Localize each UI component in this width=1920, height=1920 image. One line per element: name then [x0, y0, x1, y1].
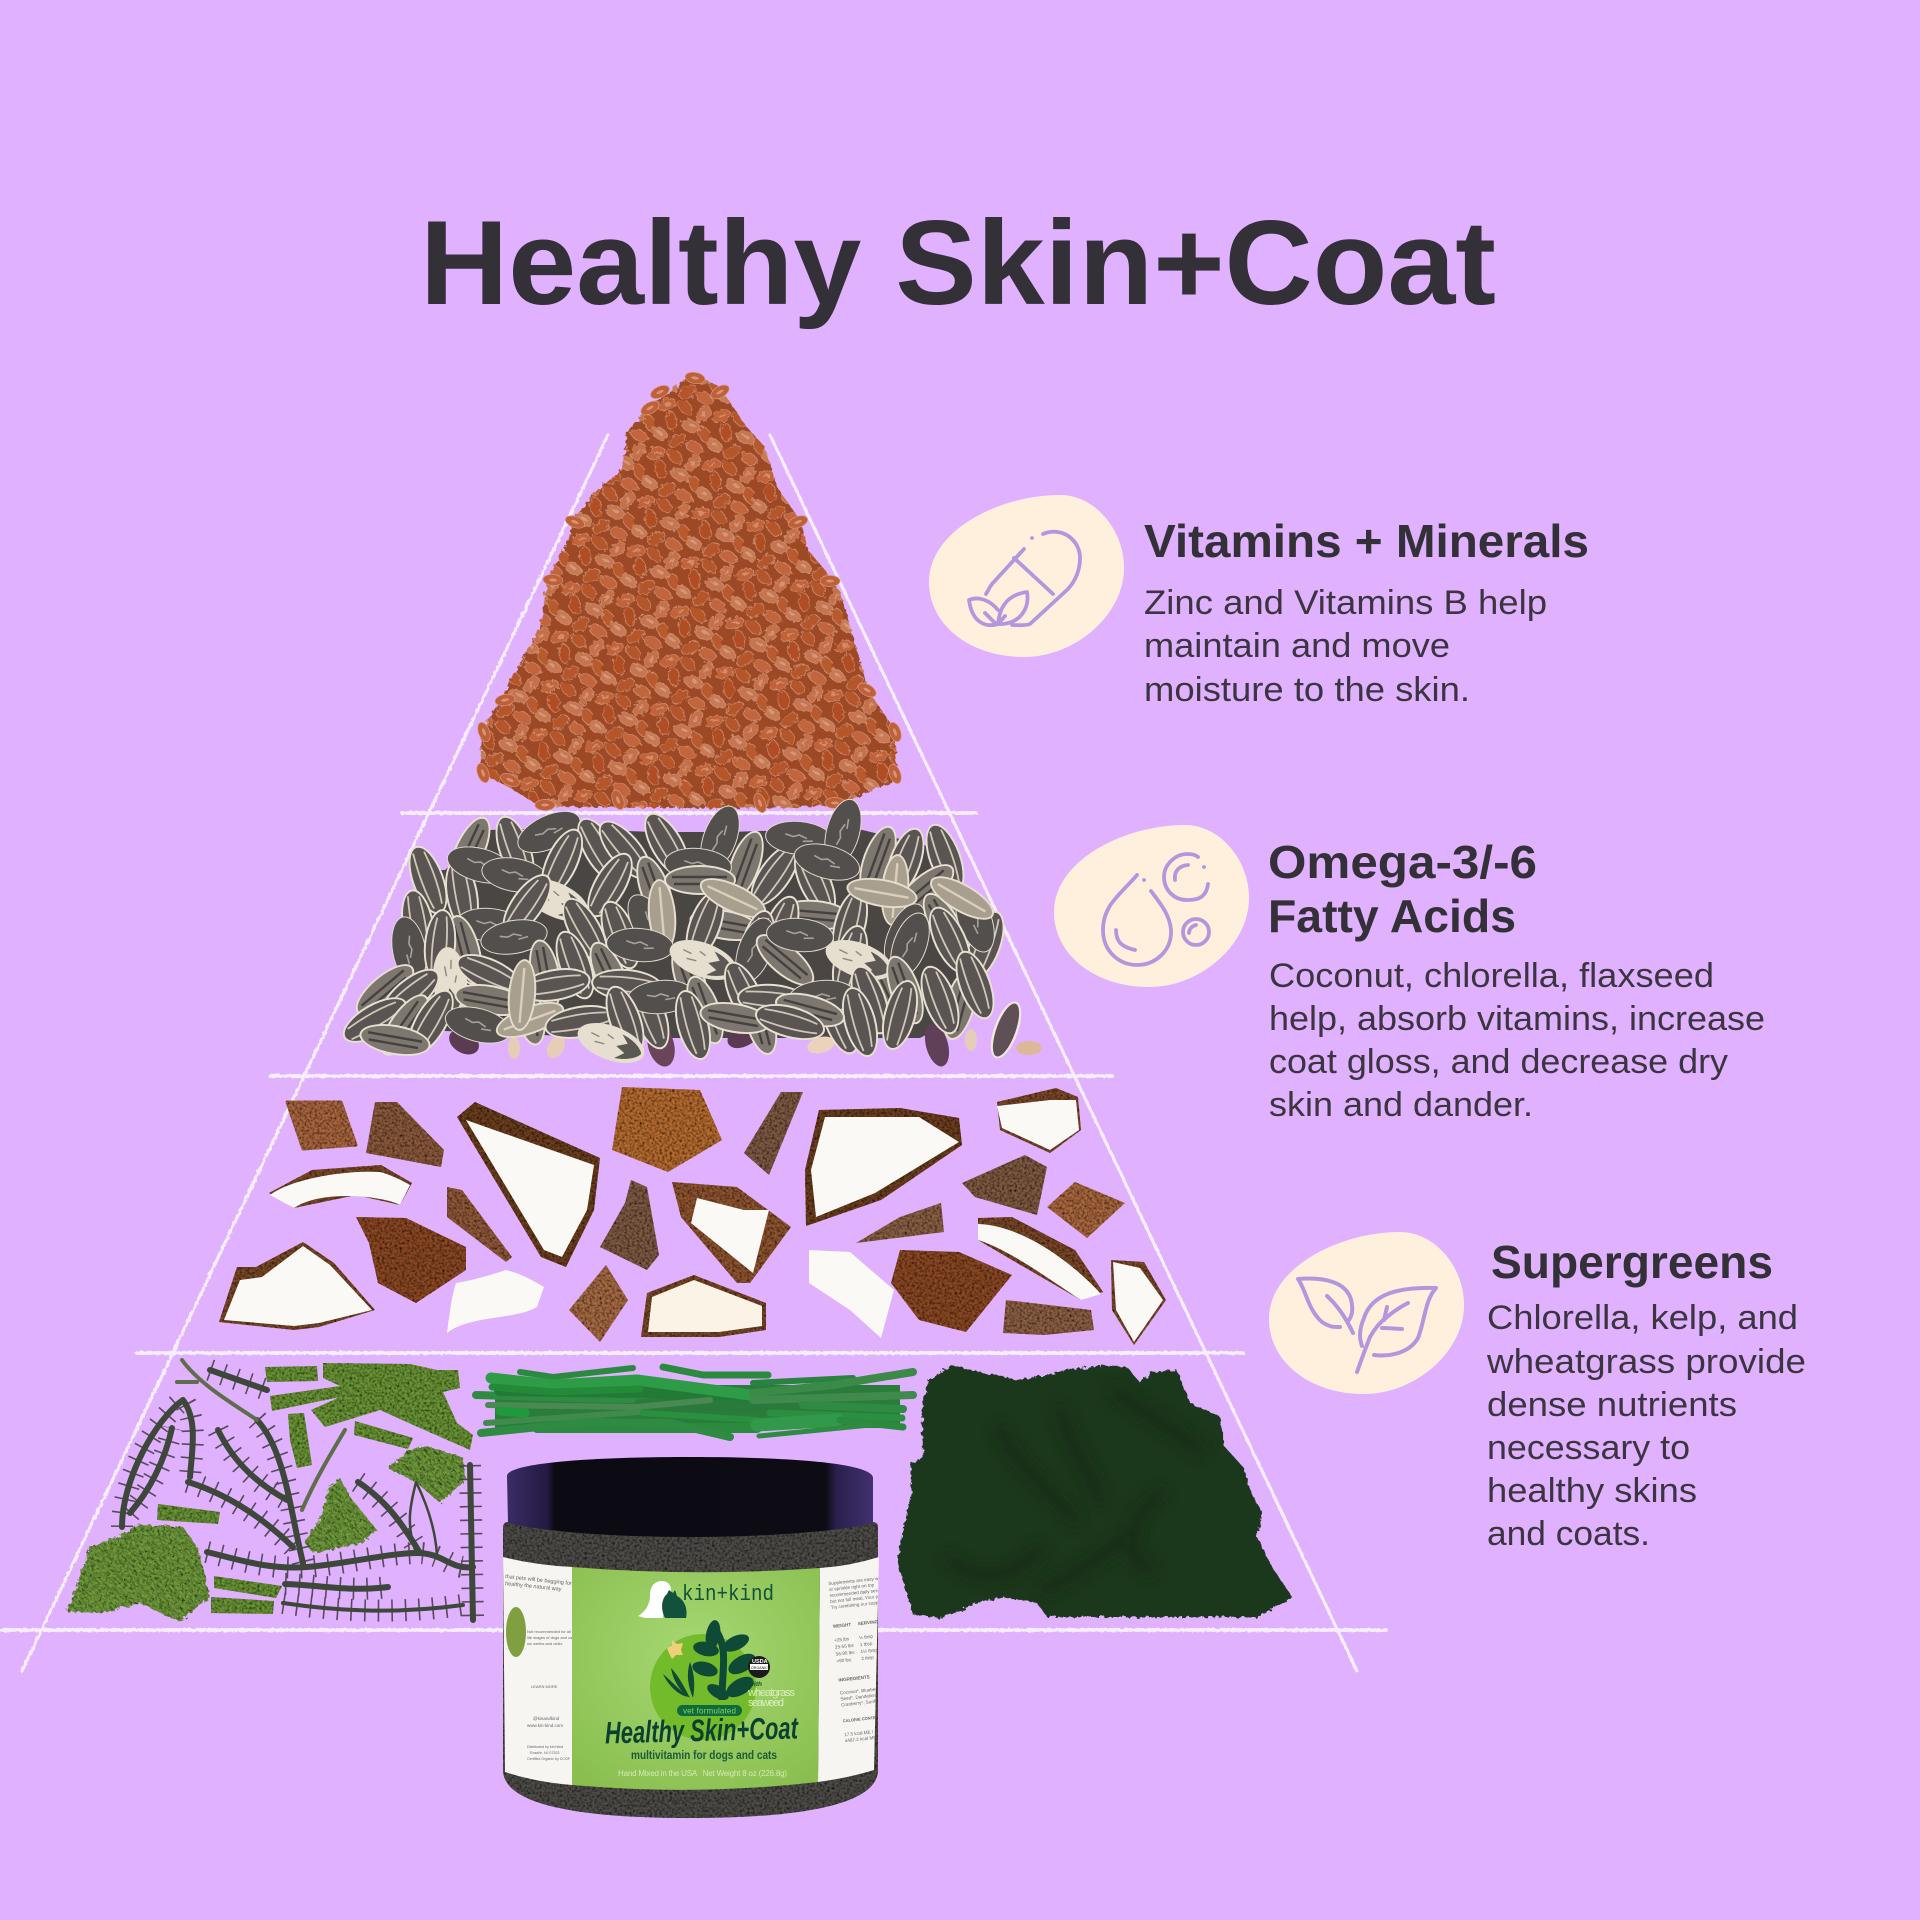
with wheatgrass seaweed — [747, 1681, 796, 1709]
white side label right — [818, 1557, 879, 1782]
heading: Supergreens — [1491, 1236, 1773, 1288]
body text: help, absorb vitamins, increase — [1269, 1000, 1765, 1038]
heading: Fatty Acids — [1268, 890, 1516, 942]
white side label left: life stages of dogs and cats — [527, 1635, 575, 1640]
icon blob: pill — [929, 495, 1124, 657]
pyramid chalk outline — [0, 435, 1386, 1671]
feature: omega fatty acids — [1054, 825, 1765, 1124]
white side label right: Supplements are easy when — [828, 1575, 887, 1586]
white side label right: Try combining our supplements — [831, 1598, 895, 1610]
body text: and coats. — [1487, 1515, 1650, 1553]
heading: Vitamins + Minerals — [1144, 515, 1589, 567]
feature: supergreens — [1269, 1232, 1806, 1553]
white side label right: <25 lbs — [834, 1636, 850, 1643]
body text: dense nutrients — [1487, 1386, 1737, 1424]
jar glass body — [503, 1522, 878, 1818]
seed layer front — [336, 866, 1002, 1071]
tier 2: sunflower seeds — [336, 795, 1042, 1071]
vet formulated pill: vet formulated — [683, 1706, 736, 1716]
body text: coat gloss, and decrease dry — [1269, 1043, 1728, 1081]
white side label left: Roselle, NJ 07203 — [530, 1751, 559, 1755]
USDA organic seal — [748, 1656, 770, 1678]
white side label right: >90 lbs — [836, 1657, 852, 1664]
white side label right: CALORIE CONTENT (CALCULATED) — [842, 1711, 913, 1723]
feature: vitamins + minerals — [929, 495, 1589, 709]
white side label left: six weeks and older. — [527, 1641, 563, 1646]
green front label — [572, 1567, 820, 1790]
body text: maintain and move — [1144, 627, 1450, 665]
body text: Chlorella, kelp, and — [1487, 1299, 1798, 1337]
white side label left: healthy the natural way — [505, 1581, 562, 1593]
body text: wheatgrass provide — [1486, 1343, 1806, 1381]
icon blob: leaves — [1269, 1232, 1464, 1394]
body text — [1144, 584, 1547, 709]
nori strips — [157, 1363, 473, 1614]
logo wordmark: kin+kind — [682, 1582, 774, 1607]
vet formulated pill — [677, 1705, 742, 1716]
body text: skin and dander. — [1269, 1086, 1533, 1124]
with wheatgrass seaweed: wheatgrass — [747, 1687, 796, 1699]
coconut husk pieces — [219, 1087, 1166, 1345]
tier 4 centre: wheatgrass — [476, 1367, 913, 1437]
white side label left: Certified Organic by CCOF — [527, 1757, 571, 1761]
white side label right: 1½ tbsp — [860, 1646, 878, 1654]
heading: Omega-3/-6 — [1268, 836, 1537, 888]
body text: necessary to — [1487, 1429, 1690, 1467]
nori patches — [67, 1445, 465, 1622]
white side label right: 2 tbsp — [861, 1655, 874, 1661]
body text: Coconut, chlorella, flaxseed — [1269, 957, 1714, 995]
white side label left: Not recommended for all — [527, 1629, 571, 1634]
white side label right: Seed*, Dandelion Root* — [840, 1691, 889, 1701]
white side label right: INGREDIENTS — [838, 1674, 870, 1683]
label footer: Hand Mixed in the USA Net Weight 8 oz (226.8g) — [618, 1769, 787, 1778]
seed layer back — [396, 795, 1012, 1059]
coconut white flesh — [224, 1100, 1163, 1342]
purple kernels and loose seeds — [445, 998, 1042, 1070]
white side label left: @kinandkind — [533, 1716, 560, 1721]
label product name: Healthy Skin+Coat — [604, 1710, 799, 1750]
white side label right: WEIGHT — [833, 1622, 852, 1629]
icon blob: droplets — [1054, 825, 1249, 987]
white side label right: but not full meal. Your pet — [830, 1594, 883, 1604]
white side label right: recommended daily serving — [829, 1587, 886, 1598]
seaweed hair strands — [122, 1370, 473, 1620]
white side label right: or sprinkle right on top — [829, 1582, 875, 1592]
with wheatgrass seaweed: with — [749, 1681, 762, 1688]
body text: Zinc and Vitamins B help — [1144, 584, 1547, 622]
seaweed stems — [122, 1360, 473, 1620]
powder shading — [950, 1392, 1200, 1590]
white side label right: 17.5 kcal ME / ½ tbsp — [844, 1727, 889, 1737]
body text: healthy skins — [1487, 1472, 1697, 1510]
product jar — [503, 1457, 915, 1818]
body text — [1269, 957, 1765, 1124]
white side label left: LEARN MORE — [531, 1684, 558, 1689]
white side label right: 4487.2 kcal ME / kg — [845, 1734, 886, 1743]
white side label left: that pets will be begging for their — [505, 1574, 584, 1588]
white side label right: 1 tbsp — [860, 1641, 873, 1647]
white side label right: SERVING — [857, 1619, 879, 1626]
white side label left — [503, 1557, 572, 1785]
label subtitle: multivitamin for dogs and cats — [631, 1750, 777, 1762]
tier 4 left: seaweed and nori — [67, 1360, 473, 1622]
white side label right: Cranberry*, Sunflower Seed* — [841, 1696, 900, 1707]
body text: moisture to the skin. — [1144, 671, 1470, 709]
white side label left: Distributed by kin+kind — [527, 1745, 563, 1749]
white side label right: ½ tbsp — [859, 1633, 874, 1640]
jar lid — [507, 1457, 873, 1537]
tier 3: coconut pieces — [219, 1087, 1166, 1345]
white side label right: 56-90 lbs — [835, 1650, 856, 1657]
white side label right: Coconut*, Blueberry*, Flax — [840, 1685, 895, 1696]
white side label left: www.kin-kind.com — [527, 1723, 563, 1728]
title: Healthy Skin+Coat — [420, 196, 1496, 330]
tier 4 right: chlorella powder — [897, 1365, 1292, 1618]
heading — [1268, 836, 1537, 942]
USDA organic seal: USDA — [752, 1659, 768, 1665]
logo: dog and cat — [638, 1581, 687, 1618]
with wheatgrass seaweed: seaweed — [748, 1697, 784, 1709]
USDA organic seal: ORGANIC — [751, 1666, 768, 1670]
white side label right: 25-55 lbs — [835, 1643, 855, 1650]
label illustration — [650, 1619, 759, 1740]
tier 1: flaxseed pile — [474, 371, 904, 814]
body text — [1486, 1299, 1806, 1553]
